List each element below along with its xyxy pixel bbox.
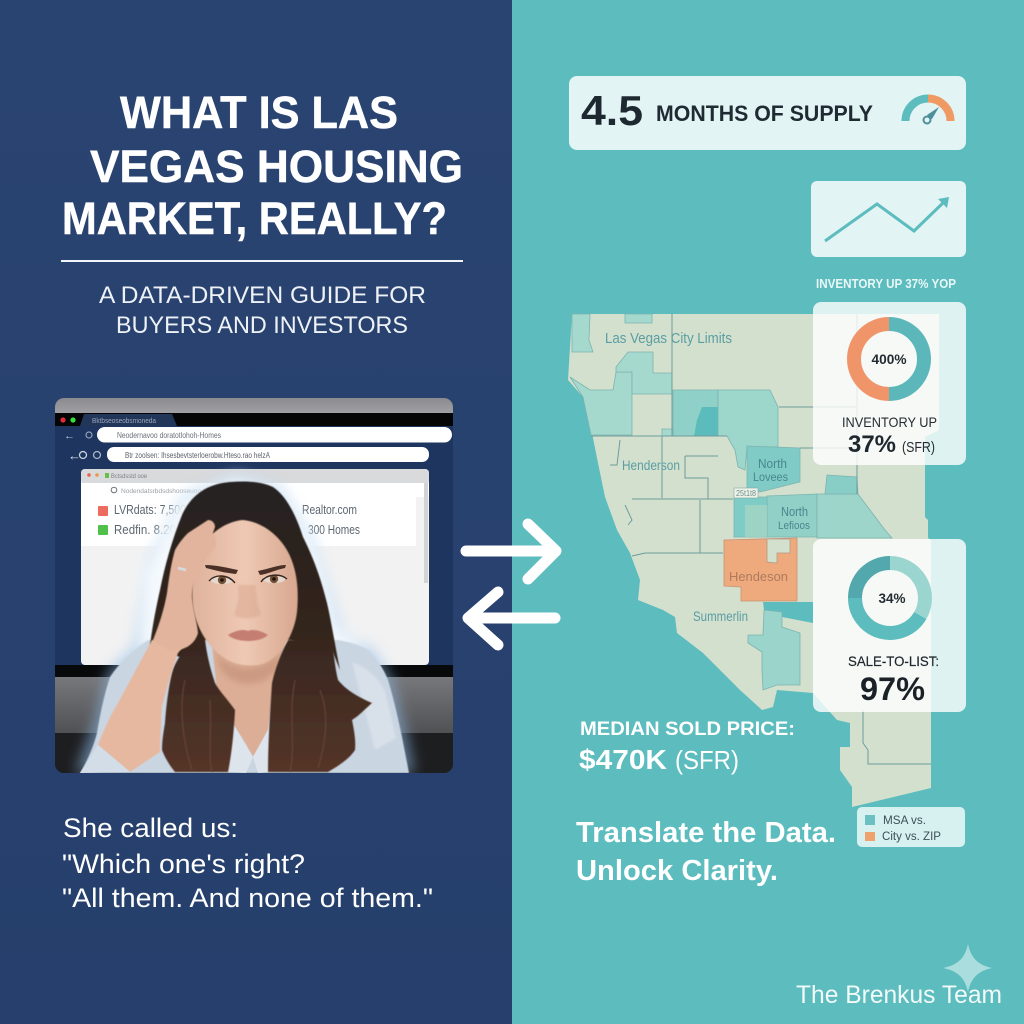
hand on forehead (153, 520, 216, 650)
browser backdrop: ← (68, 448, 81, 463)
map labels: North (781, 505, 808, 519)
panel: inventory donut card (813, 302, 966, 465)
browser backdrop: Nodendatsrbdsdshooseuoo (121, 488, 201, 495)
browser backdrop: Bctsdsstd ooe (111, 474, 148, 480)
browser backdrop: ← (64, 430, 75, 442)
browser backdrop: Redfin. 8.20 (114, 523, 176, 537)
quote text (62, 813, 433, 913)
legend: MSA vs. (883, 815, 926, 827)
neck and chest (212, 645, 285, 757)
map labels: Hendeson (729, 569, 788, 584)
browser backdrop: LVRdats: 7,500 (114, 503, 186, 517)
panel: trend line chart (811, 181, 966, 257)
neck shadow (218, 654, 281, 684)
orange cut-out (767, 539, 790, 563)
brand: team name: The Brenkus Team (796, 981, 1002, 1009)
forearm (98, 640, 192, 772)
arrowhead (938, 197, 949, 208)
arrow: right (466, 524, 556, 579)
darker district (694, 407, 718, 436)
right brow (258, 565, 286, 575)
eyes (209, 575, 287, 584)
brand: star icon (943, 944, 992, 992)
lips (228, 630, 268, 641)
shirt highlights (352, 662, 396, 750)
boundary lines (591, 314, 931, 764)
map labels: Las Vegas City Limits (605, 331, 732, 347)
subtitle: A DATA-DRIVEN GUIDE FOR (99, 282, 426, 309)
title: MARKET, REALLY? (62, 193, 447, 244)
face (192, 520, 298, 665)
land mass (568, 314, 939, 807)
browser backdrop: Realtor.com (302, 503, 357, 517)
map labels: Lefioos (778, 520, 810, 532)
glow: blue halo around body (76, 476, 414, 773)
value: 4.5: 4.5 (581, 87, 643, 134)
hair lower left (162, 640, 235, 772)
value: 37% (848, 431, 896, 458)
shirt (80, 640, 409, 773)
photo: frustrated woman in front of browser windows (55, 398, 453, 773)
map labels: Summerlin (693, 609, 748, 624)
shirt collar (228, 692, 272, 773)
median sold price (579, 718, 795, 775)
left brow (205, 565, 238, 574)
browser backdrop (55, 398, 453, 773)
map labels (605, 331, 810, 624)
panel: inventory donut card: (SFR) (902, 439, 935, 456)
donut chart (855, 563, 925, 633)
hair lower right (268, 640, 372, 772)
line with arrow (825, 201, 945, 241)
median sold price: (SFR) (675, 745, 739, 775)
ring (178, 568, 186, 570)
browser backdrop: Neodernavoo doratotlohoh-Homes (117, 431, 221, 440)
quote text: "All them. And none of them." (62, 883, 433, 913)
label: months of supply: MONTHS OF SUPPLY (656, 101, 873, 126)
subtitle (99, 282, 426, 339)
hair upper (150, 482, 340, 670)
orange district (724, 538, 797, 601)
value: 97% (860, 671, 925, 707)
median sold price: $470K (579, 744, 667, 775)
label: INVENTORY UP (842, 414, 937, 430)
map labels: Henderson (622, 458, 680, 473)
subtitle: BUYERS AND INVESTORS (116, 312, 408, 339)
panel: right teal background (512, 0, 1024, 1024)
shirt cuff (80, 745, 130, 773)
glow: white halo around head (138, 476, 365, 680)
map labels: Lovees (753, 470, 788, 484)
highway marker: 25t1t8 (736, 489, 756, 498)
map of Las Vegas area (568, 314, 939, 807)
caption: inventory up yoy: INVENTORY UP 37% YOP (816, 276, 956, 291)
woman (80, 482, 409, 773)
teal districts (570, 314, 892, 690)
arrow: left (468, 592, 555, 645)
legend: City vs. ZIP (882, 831, 941, 843)
call to action (576, 817, 836, 887)
hair strands (182, 680, 326, 772)
browser backdrop: 300 Homes (308, 523, 360, 537)
median sold price: MEDIAN SOLD PRICE: (580, 718, 795, 740)
donut value: 34% (878, 591, 906, 606)
quote text: She called us: (63, 813, 238, 843)
nose (234, 585, 261, 618)
icon: gauge (906, 98, 950, 124)
label: SALE-TO-LIST: (848, 653, 939, 669)
title: VEGAS HOUSING (90, 141, 463, 192)
water bay (763, 602, 813, 623)
map labels: North (758, 457, 787, 471)
call to action: Translate the Data. (576, 817, 836, 849)
panel: months of supply (569, 76, 966, 150)
browser backdrop: Bktbseoseobsmoneda (92, 418, 156, 425)
browser backdrop: Btr zoolsen: Ihsesbevtsterloerobw.Hteso.rao helzA (125, 451, 271, 460)
call to action: Unlock Clarity. (576, 855, 778, 887)
panel: left navy background (0, 0, 512, 1024)
panel: sale-to-list donut card (813, 539, 966, 712)
quote text: "Which one's right? (62, 849, 305, 879)
title (62, 87, 463, 244)
legend (857, 807, 965, 847)
title underline (61, 260, 463, 262)
donut chart (854, 324, 924, 394)
donut value: 400% (872, 351, 907, 367)
title: WHAT IS LAS (120, 87, 398, 138)
hair parting (242, 484, 244, 520)
